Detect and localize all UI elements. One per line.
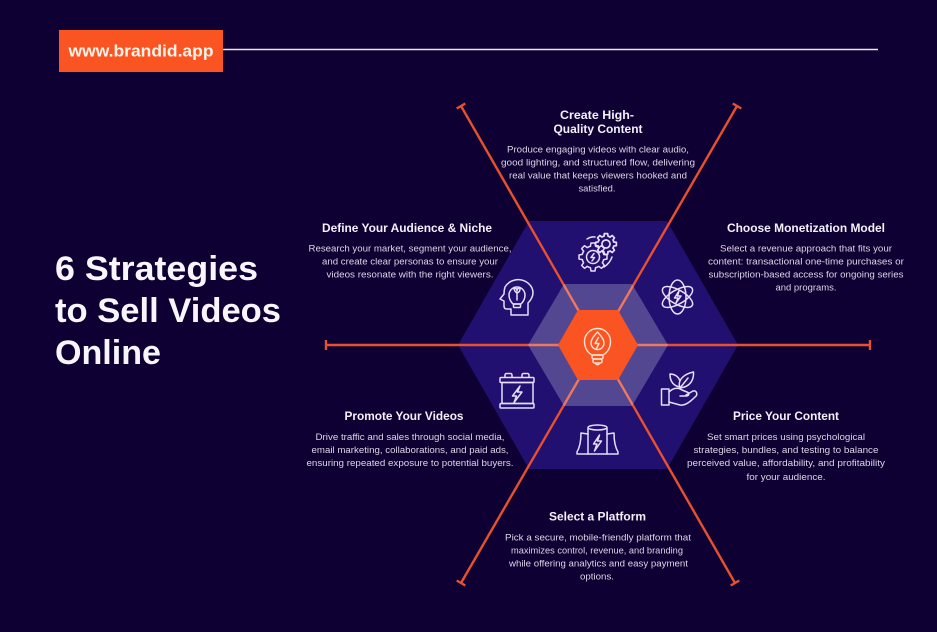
text block: promote your videos bbox=[306, 409, 514, 469]
text block: price your content: perceived value, affordability, and profitability bbox=[687, 458, 885, 469]
centre hexagon bbox=[558, 310, 638, 380]
text block: define your audience and niche: Research your market, segment your audience, bbox=[308, 244, 512, 254]
icon: hand holding plant bbox=[662, 372, 697, 405]
text block: create high-quality content: satisfied. bbox=[578, 184, 616, 194]
text block: price your content: Set smart prices using psychological bbox=[707, 432, 865, 443]
text block: choose monetization model: and programs. bbox=[776, 282, 836, 294]
text block: choose monetization model: Choose Monetization Model bbox=[727, 221, 885, 235]
text block: price your content: Price Your Content bbox=[733, 409, 839, 423]
text block: choose monetization model: Select a revenue approach that fits your bbox=[720, 244, 893, 254]
text block: price your content: strategies, bundles, and testing to balance bbox=[694, 445, 878, 456]
title: 6 Strategies bbox=[55, 250, 258, 288]
icon: atom bbox=[659, 280, 696, 314]
text block: define your audience and niche: Define Your Audience & Niche bbox=[322, 221, 492, 235]
icon: power plant bbox=[577, 425, 618, 454]
outer hexagon bbox=[458, 221, 738, 469]
text block: select a platform: options. bbox=[580, 572, 614, 582]
text block: select a platform: while offering analytics and easy payment bbox=[508, 558, 688, 570]
text block: define your audience and niche: videos resonate with the right viewers. bbox=[326, 270, 494, 280]
text block: choose monetization model: content: transactional one-time purchases or bbox=[708, 256, 905, 268]
text block: promote your videos: Drive traffic and sales through social media, bbox=[316, 432, 504, 443]
text block: promote your videos: Promote Your Videos bbox=[344, 409, 464, 423]
text block: define your audience and niche bbox=[308, 221, 512, 280]
text block: choose monetization model bbox=[708, 221, 905, 294]
text block: define your audience and niche: and create clear personas to ensure your bbox=[322, 256, 499, 268]
text block: promote your videos: ensuring repeated exposure to potential buyers. bbox=[306, 458, 514, 469]
text block: select a platform: Pick a secure, mobile-friendly platform that bbox=[505, 532, 691, 544]
brand badge: www.brandid.app bbox=[67, 42, 214, 60]
title bbox=[55, 250, 281, 372]
icon: light bulb with flame bbox=[584, 328, 610, 365]
text block: create high-quality content: Create High- bbox=[560, 108, 634, 122]
icon: head with light bulb bbox=[500, 280, 533, 315]
text block: price your content bbox=[687, 409, 885, 483]
text block: select a platform: Select a Platform bbox=[549, 510, 646, 524]
divider lines with end caps bbox=[326, 104, 870, 586]
header rule bbox=[223, 48, 878, 50]
text block: price your content: for your audience. bbox=[746, 472, 826, 483]
brand badge bbox=[59, 30, 223, 72]
icon: gears bbox=[579, 234, 616, 271]
text block: choose monetization model: subscription-based access for ongoing series bbox=[708, 270, 904, 280]
text block: create high-quality content: real value that keeps viewers hooked and bbox=[509, 170, 687, 182]
middle hexagon bbox=[528, 284, 668, 406]
text block: create high-quality content bbox=[501, 108, 695, 194]
title: to Sell Videos bbox=[55, 292, 281, 330]
text block: select a platform: maximizes control, revenue, and branding bbox=[511, 546, 683, 556]
title: Online bbox=[55, 334, 161, 372]
text block: create high-quality content: Produce engaging videos with clear audio, bbox=[507, 144, 689, 156]
text block: create high-quality content: good lighting, and structured flow, delivering bbox=[501, 158, 695, 168]
text block: promote your videos: email marketing, collaborations, and paid ads, bbox=[312, 445, 508, 456]
icon: battery bbox=[500, 374, 534, 408]
text block: create high-quality content: Quality Content bbox=[554, 122, 642, 136]
text block: select a platform bbox=[505, 510, 691, 582]
